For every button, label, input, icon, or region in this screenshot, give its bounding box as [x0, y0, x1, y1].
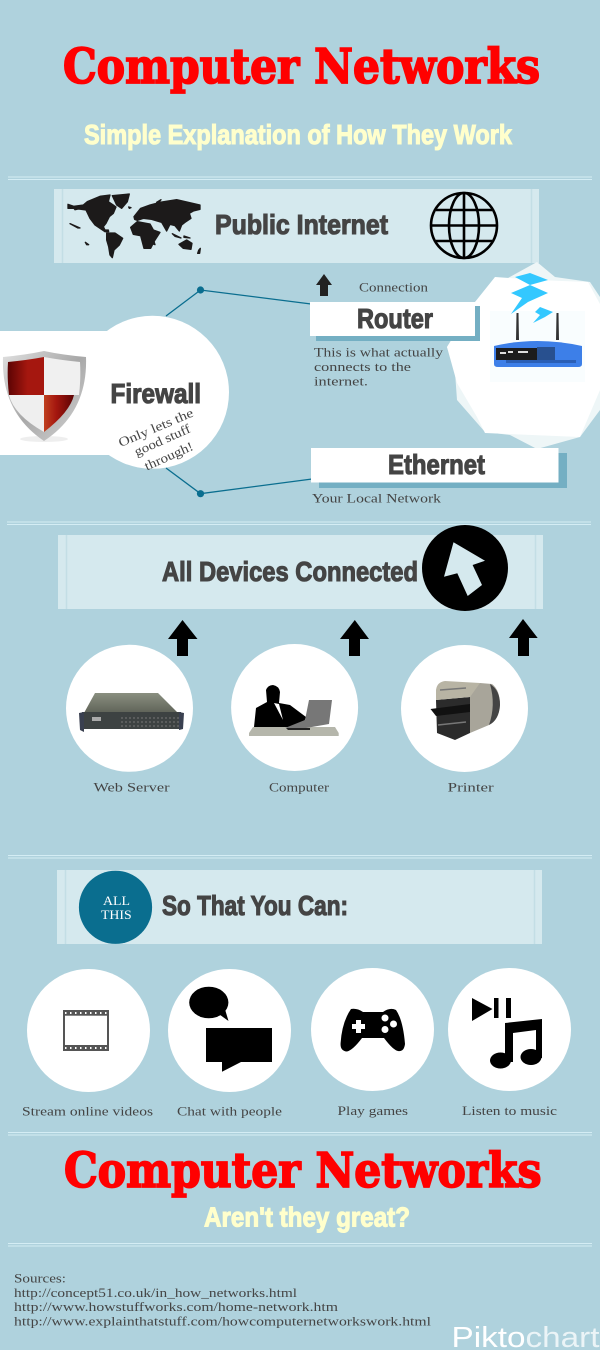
burst: router background	[447, 262, 600, 449]
firewall note: through!	[142, 438, 195, 473]
badge: all this	[79, 871, 152, 944]
panel: firewall	[0, 316, 229, 473]
label: connection: Connection	[359, 280, 429, 294]
heading: router: Router	[357, 303, 433, 334]
sources: http://www.explainthatstuff.com/howcomputernetworkswork.html	[14, 1314, 431, 1328]
icon: play pause	[472, 998, 511, 1021]
panel: so that you can	[57, 870, 542, 944]
icon: world map	[68, 194, 200, 258]
icon: wifi signal bolts	[511, 273, 553, 323]
router box	[310, 302, 480, 341]
arrow: computer up	[340, 620, 369, 656]
firewall note: good stuff	[132, 421, 193, 459]
connector lines: firewall to router and ethernet	[166, 286, 312, 497]
ethernet box	[311, 448, 567, 488]
firewall note: Only lets the	[116, 405, 196, 450]
subtitle: Simple Explanation of How They Work	[84, 119, 512, 150]
heading: all devices connected: All Devices Connected	[162, 556, 418, 587]
arrow: up to internet	[316, 274, 332, 296]
arrow: printer up	[509, 619, 538, 656]
firewall note	[116, 405, 196, 473]
icon: film strip	[63, 1010, 109, 1051]
activity: chat	[168, 969, 291, 1119]
closing subtitle: Aren't they great?	[204, 1202, 410, 1232]
heading: ethernet: Ethernet	[388, 449, 485, 480]
heading: public internet: Public Internet	[215, 209, 388, 240]
device: computer	[231, 644, 358, 794]
icon: speech bubbles	[189, 987, 272, 1072]
label: listen to music: Listen to music	[462, 1103, 557, 1118]
label: web server: Web Server	[94, 780, 170, 794]
icon: shield	[3, 351, 86, 442]
router description: internet.	[314, 374, 368, 388]
activity: games	[311, 968, 434, 1118]
icon: globe	[431, 193, 497, 258]
router description: This is what actually	[314, 344, 444, 360]
icon: cursor badge	[422, 525, 508, 611]
title: Computer Networks	[63, 39, 540, 95]
panel: public internet	[54, 189, 539, 263]
icon: game controller	[341, 1009, 405, 1052]
heading: firewall: Firewall	[110, 378, 201, 409]
device: printer	[401, 645, 528, 794]
badge: all this: THIS	[101, 907, 132, 922]
label: printer: Printer	[448, 780, 495, 794]
heading: so that you can: So That You Can:	[162, 890, 348, 921]
activity: music	[448, 968, 571, 1118]
sources: http://concept51.co.uk/in_how_networks.html	[14, 1285, 297, 1300]
badge: all this: ALL	[103, 893, 130, 908]
arrow: web server up	[168, 620, 198, 656]
icon: wifi router	[490, 311, 585, 382]
label: play games: Play games	[338, 1103, 408, 1118]
icon: music note	[490, 1019, 542, 1068]
activity: stream videos	[22, 969, 153, 1119]
sources: http://www.howstuffworks.com/home-network.htm	[14, 1299, 338, 1314]
closing title: Computer Networks	[64, 1143, 542, 1199]
ethernet description: Your Local Network	[312, 490, 442, 506]
sources: Sources:	[14, 1270, 66, 1286]
label: computer: Computer	[269, 780, 330, 794]
label: stream online videos: Stream online videos	[22, 1104, 153, 1119]
panel: all devices connected	[58, 525, 543, 611]
label: chat with people: Chat with people	[177, 1104, 282, 1119]
device: web server	[66, 645, 193, 794]
router description: connects to the	[314, 359, 411, 374]
